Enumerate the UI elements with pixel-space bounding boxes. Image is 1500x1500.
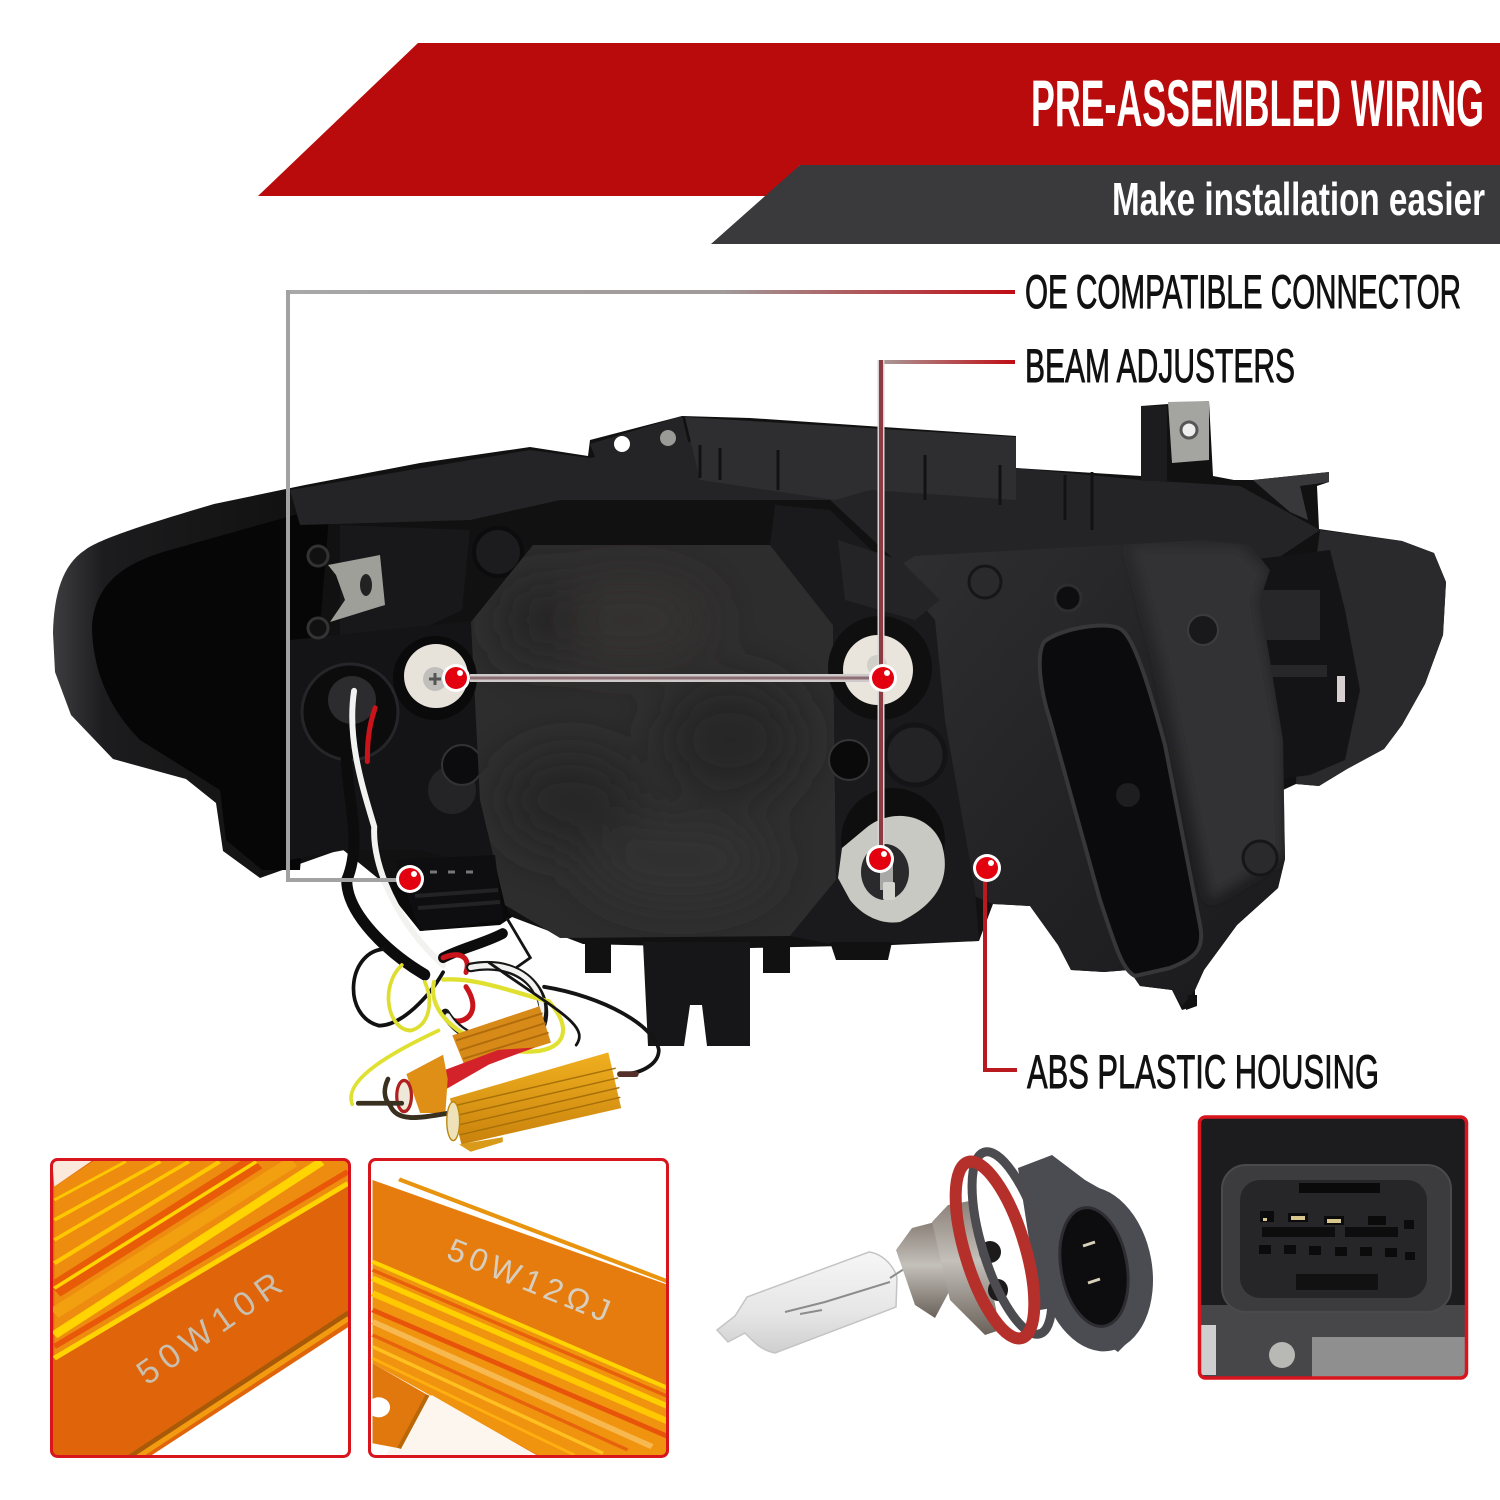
small screw post <box>1055 585 1081 611</box>
yellow tail <box>351 1030 439 1104</box>
bright facet <box>1130 545 1284 900</box>
wiring grommet <box>302 664 398 760</box>
pins <box>1083 1242 1100 1283</box>
round cap lower <box>428 766 476 814</box>
right lens end <box>1296 530 1446 786</box>
lower adjuster <box>838 816 945 923</box>
black wire mid <box>489 919 579 1045</box>
front foot <box>459 1137 503 1152</box>
metal base front <box>896 1222 950 1318</box>
marker: right adjuster <box>869 664 897 692</box>
filament <box>785 1262 915 1314</box>
lower adjuster ring <box>841 788 945 892</box>
top key <box>1299 1183 1380 1193</box>
callout leader: OE connector <box>288 290 1015 880</box>
black wire outer <box>445 966 544 1044</box>
inset: 50W12ΩJ resistor <box>367 1158 670 1460</box>
oval recess <box>1040 626 1201 976</box>
big center cover <box>471 545 836 938</box>
front lead <box>620 1068 636 1080</box>
top vent box <box>685 417 1016 500</box>
headlight silhouette <box>53 401 1446 1010</box>
marker: connector <box>396 865 424 893</box>
grommet inner <box>328 676 376 724</box>
white wire <box>352 691 443 965</box>
right side ribs <box>1250 590 1327 677</box>
upper pin brass <box>1263 1216 1341 1223</box>
rear connector <box>395 855 503 931</box>
connector rim <box>390 850 512 931</box>
cylinder plug <box>474 528 522 576</box>
back resistor ribs <box>457 1014 548 1059</box>
gray flange <box>956 1143 1068 1343</box>
mount hole <box>614 436 630 452</box>
black wire right <box>544 987 659 1074</box>
small label sticker <box>1337 676 1345 702</box>
right end dark inner <box>1250 550 1360 780</box>
mounting black block <box>340 525 470 640</box>
front end cap <box>447 1102 460 1141</box>
stamped value: 50W10R <box>130 1265 289 1393</box>
lower pins <box>1259 1245 1415 1260</box>
bottom center foot <box>643 942 750 1046</box>
white loop <box>448 966 542 1042</box>
glass capsule <box>717 1252 897 1353</box>
yellow loop right <box>433 979 563 1052</box>
headlight rear view <box>53 401 1446 1046</box>
bottom key <box>1296 1274 1378 1290</box>
callout leader: housing <box>985 880 1017 1070</box>
divider bars <box>1262 1227 1398 1237</box>
stamped value: 50W12ΩJ <box>442 1231 615 1329</box>
cover right frame <box>770 505 979 945</box>
large right cover <box>892 540 1285 1006</box>
phillips screw <box>442 745 482 785</box>
front stripes <box>455 1068 620 1135</box>
plug housing <box>1026 1178 1166 1360</box>
connector shell <box>1222 1165 1451 1312</box>
right bracket <box>1253 472 1329 520</box>
upper housing rim <box>290 440 1320 565</box>
harness knot <box>443 934 503 958</box>
dark socket area <box>290 620 500 870</box>
plug tab <box>1108 1335 1135 1352</box>
black main wire <box>346 735 425 975</box>
middle resistor <box>406 1055 448 1113</box>
back resistor <box>452 1006 551 1069</box>
mounting screw <box>1269 1342 1295 1368</box>
cover mottling <box>526 610 774 824</box>
marker: lower adjuster <box>866 845 894 873</box>
header banner: dark <box>711 165 1500 244</box>
bottom tabs <box>585 942 1197 1010</box>
knob <box>1188 615 1218 645</box>
back resistor red label <box>434 1047 535 1094</box>
mounting tab left <box>590 416 690 470</box>
wiring harness <box>346 691 659 1152</box>
header banner: red <box>258 43 1500 196</box>
center plug <box>885 725 945 785</box>
metal clip <box>308 546 385 638</box>
upper right adjuster <box>828 616 932 720</box>
inset: OE connector photo <box>1198 1115 1468 1380</box>
H11 bulb photo <box>717 1143 1166 1360</box>
connector cavity <box>1240 1180 1427 1298</box>
screw center <box>829 740 869 780</box>
red seal <box>939 1153 1051 1347</box>
recess bolt <box>1116 783 1140 807</box>
top metal bracket <box>1141 401 1209 481</box>
left adjuster <box>393 636 477 720</box>
upper pins <box>1260 1211 1414 1229</box>
marker: left adjuster <box>442 664 470 692</box>
plug opening <box>1051 1202 1137 1332</box>
red wire <box>367 708 375 761</box>
red knot <box>443 955 473 1021</box>
inset: 50W10R resistor <box>50 1158 352 1460</box>
middle end cap <box>397 1080 411 1111</box>
black loop left <box>353 949 443 1026</box>
metal base rear <box>932 1200 1000 1335</box>
upper right bump <box>838 540 940 620</box>
vent ribs <box>700 445 1092 530</box>
base holes <box>979 1241 1008 1301</box>
marker: housing <box>973 854 1001 882</box>
mount screw <box>660 430 676 446</box>
front resistor <box>450 1052 621 1144</box>
round plugs <box>944 566 1277 906</box>
label: beam adjusters: BEAM ADJUSTERS <box>1025 339 1295 392</box>
callout leader: beam adjusters <box>470 360 1015 848</box>
lead wires <box>358 1079 450 1118</box>
lens inner cavity <box>92 505 330 870</box>
plug rear body <box>1018 1155 1120 1310</box>
yellow loop left <box>388 965 429 1030</box>
